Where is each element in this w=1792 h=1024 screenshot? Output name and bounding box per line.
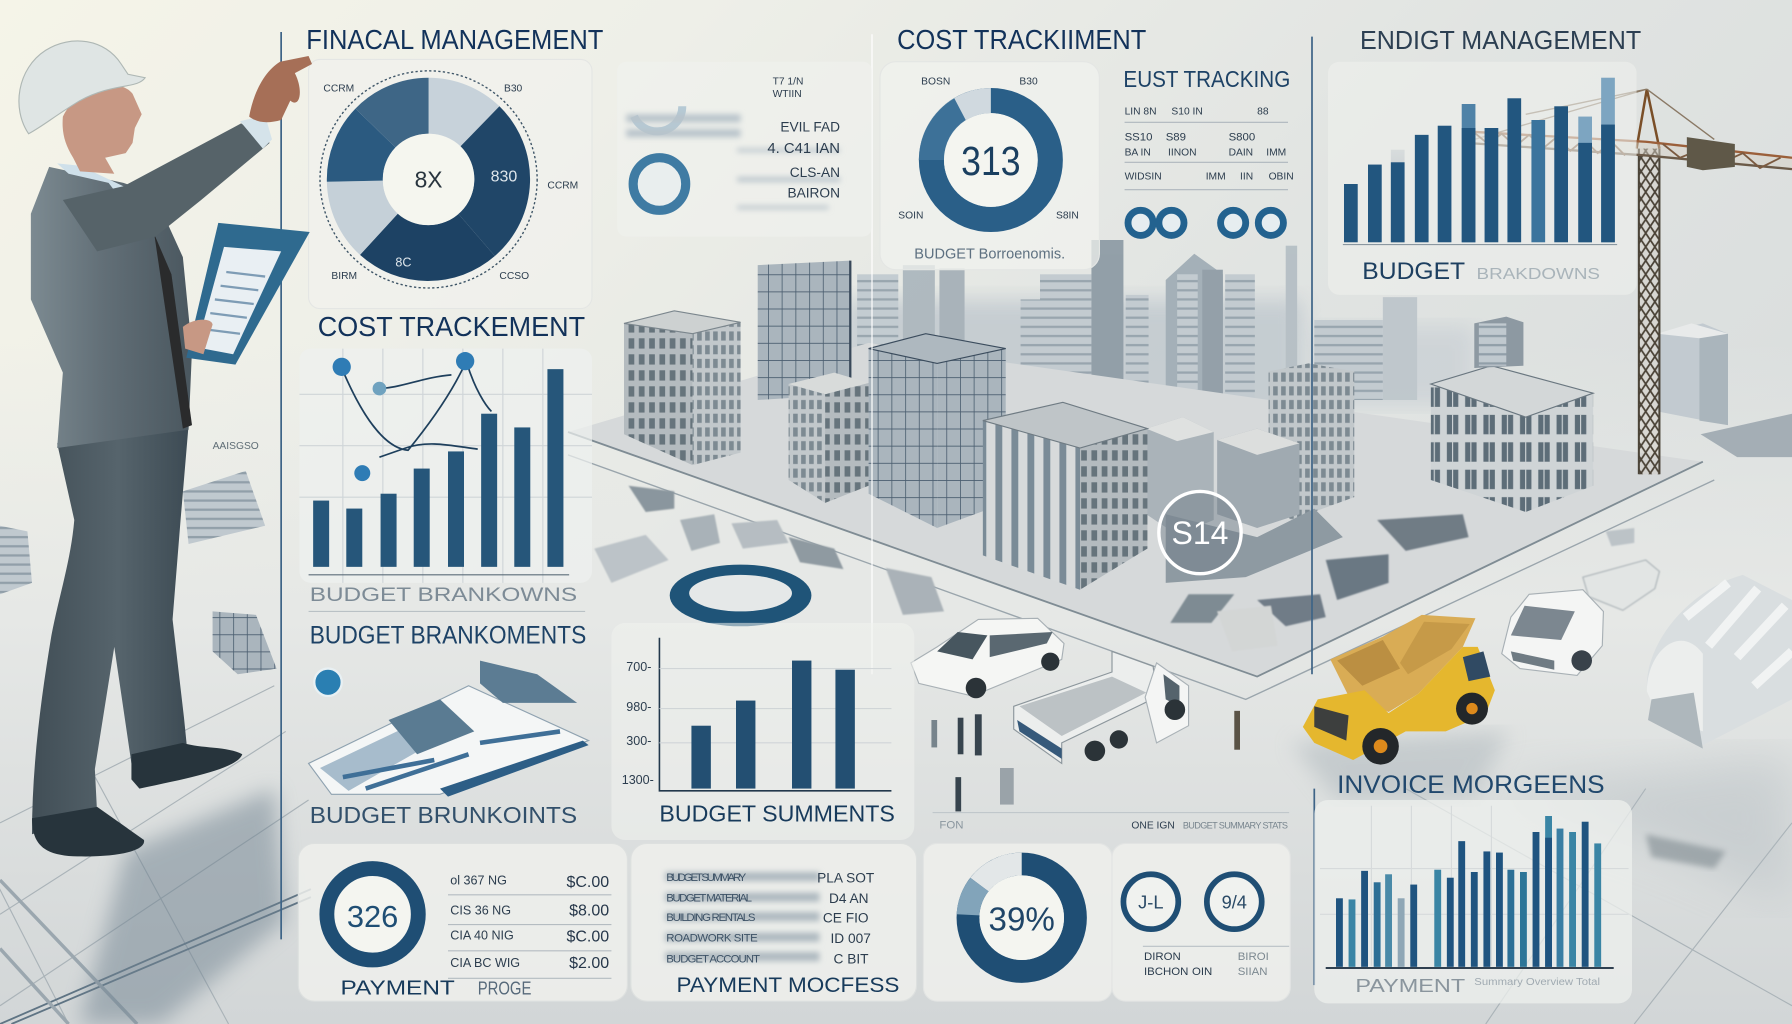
row text: D4 AN bbox=[829, 891, 869, 906]
axis labels: 980- bbox=[626, 700, 651, 714]
pie chart: 830 bbox=[491, 169, 517, 186]
tracking table: IIN bbox=[1240, 171, 1253, 182]
payment rows: $C.00 bbox=[566, 874, 609, 891]
ring captions: IBCHON bbox=[1144, 966, 1188, 978]
row text: BUDGET ACCOUNT bbox=[666, 953, 760, 965]
tracking table: IINON bbox=[1168, 147, 1197, 158]
row text: C BIT bbox=[834, 951, 869, 966]
pie chart: 8X bbox=[415, 166, 443, 192]
panel: cost tracking donut: COST TRACKIIMENT bbox=[897, 24, 1147, 55]
mid building bbox=[789, 373, 869, 503]
panel: budget document bbox=[309, 621, 589, 828]
pie labels: CCRM bbox=[547, 181, 578, 192]
raised arm bbox=[63, 123, 270, 251]
panel: payment rows list: PAYMENT MOCFESS bbox=[677, 972, 899, 997]
row text: BUILDING RENTALS bbox=[666, 912, 756, 924]
bars bbox=[691, 661, 855, 789]
donut labels: B30 bbox=[1019, 77, 1038, 88]
four circular icons bbox=[1128, 210, 1283, 235]
tracking table bbox=[1125, 106, 1294, 190]
tracking table: SS10 bbox=[1125, 132, 1152, 144]
panel: invoice chart: Summary Overview Total bbox=[1474, 977, 1600, 988]
yellow dump truck bbox=[1303, 615, 1495, 765]
pie labels: B30 bbox=[504, 83, 523, 94]
money circle: S14 bbox=[1172, 515, 1228, 551]
tracking table: S89 bbox=[1166, 132, 1186, 144]
ring one bbox=[1123, 874, 1178, 929]
raised hand bbox=[249, 56, 312, 122]
axis labels: 700- bbox=[626, 660, 651, 674]
tablet with notes bbox=[186, 223, 310, 365]
payment rows: $2.00 bbox=[569, 955, 609, 972]
pie labels: BIRM bbox=[331, 271, 357, 282]
donut 313 bbox=[919, 88, 1050, 219]
main building bbox=[983, 402, 1147, 590]
caption strip: BUDGET SUMMARY STATS bbox=[1183, 821, 1288, 831]
panel: budget summary chart bbox=[611, 623, 914, 840]
tower crane bbox=[1466, 89, 1792, 474]
tracking table: DAIN bbox=[1229, 147, 1253, 158]
axis labels: 1300- bbox=[622, 773, 654, 787]
donut labels: SOIN bbox=[898, 210, 923, 221]
ring marker bbox=[670, 565, 811, 626]
caption strip bbox=[933, 813, 1289, 832]
vertical divider lines bbox=[281, 32, 1314, 985]
tracking table: LIN 8N bbox=[1125, 106, 1157, 117]
panel: bust tracking: EUST TRACKING bbox=[1123, 66, 1290, 92]
panel: payment progress 326 bbox=[298, 843, 627, 1001]
panel: payment rows list bbox=[631, 843, 917, 1001]
panel: financial management bbox=[306, 24, 604, 309]
tracking table: BA IN bbox=[1125, 147, 1151, 158]
pie chart: 8C bbox=[395, 255, 411, 269]
donut labels bbox=[898, 77, 1079, 262]
trend line bbox=[342, 361, 491, 457]
white car bbox=[911, 618, 1064, 698]
location pin icon bbox=[314, 669, 342, 696]
list values: T7 1/N bbox=[773, 77, 803, 88]
neck and head bbox=[63, 85, 142, 174]
blurred rows bbox=[626, 114, 840, 209]
ring icon bbox=[633, 158, 686, 210]
axis labels bbox=[622, 660, 654, 787]
row text bbox=[666, 870, 875, 966]
person: engineer with hard hat bbox=[19, 41, 312, 856]
distant skyline bbox=[846, 240, 1474, 437]
jacket bbox=[31, 167, 192, 448]
tracking table: OBIN bbox=[1269, 171, 1294, 182]
pale tower right bbox=[1657, 323, 1728, 425]
hard hat bbox=[19, 41, 145, 134]
panel: budget management chart: BUDGET bbox=[1362, 258, 1465, 285]
row text: BUDGET SUMMARY bbox=[666, 872, 747, 884]
payment rows: CIS 36 NG bbox=[450, 903, 511, 917]
tracking table: WIDSIN bbox=[1125, 171, 1162, 182]
panel: budget management chart: ENDIGT MANAGEMENT bbox=[1360, 25, 1641, 55]
list values bbox=[767, 77, 840, 201]
axis labels: 300- bbox=[626, 734, 651, 748]
panel: invoice chart: INVOICE MORGEENS bbox=[1337, 771, 1605, 799]
panel: ring indicators bbox=[1112, 843, 1290, 1001]
panel: payment list bbox=[617, 62, 872, 237]
pie labels bbox=[323, 83, 578, 282]
panel: invoice chart bbox=[1314, 771, 1632, 1003]
caption strip: FON bbox=[939, 820, 964, 832]
list values: CLS-AN bbox=[790, 165, 840, 180]
donut labels: BUDGET Borroenomis. bbox=[914, 246, 1065, 262]
ring captions: BIROI bbox=[1238, 951, 1269, 963]
panel: bust tracking bbox=[1123, 66, 1294, 235]
row text: CE FIO bbox=[823, 910, 869, 925]
donut 39 percent bbox=[957, 853, 1075, 971]
small site buildings bbox=[0, 414, 1792, 674]
panel: budget document: BUDGET BRANKOMENTS bbox=[310, 621, 586, 649]
donut 326: 326 bbox=[347, 899, 398, 934]
list values: 4. C41 IAN bbox=[767, 141, 840, 157]
scaffold tower bbox=[758, 261, 850, 400]
row text: PLA SOT bbox=[817, 870, 875, 885]
holding hand bbox=[183, 320, 213, 354]
panel: invoice chart: PAYMENT bbox=[1355, 975, 1465, 996]
ring captions bbox=[1143, 946, 1289, 978]
ground plaza and road bbox=[568, 343, 1714, 699]
panel: cost tracking chart: COST TRACKEMENT bbox=[318, 311, 585, 342]
panel: budget management chart: BRAKDOWNS bbox=[1477, 266, 1600, 283]
panel: budget management chart bbox=[1328, 25, 1641, 295]
site workers bbox=[931, 711, 1240, 811]
tracking table: 88 bbox=[1257, 106, 1269, 117]
ring one: J-L bbox=[1138, 892, 1164, 913]
shirt cuff bbox=[240, 115, 272, 149]
list values: EVIL FAD bbox=[780, 119, 840, 134]
pie labels: CCSO bbox=[499, 271, 529, 282]
payment rows: ol 367 NG bbox=[450, 874, 507, 888]
list values: WTIIN bbox=[773, 89, 802, 100]
right building bbox=[1431, 366, 1593, 512]
faded ring icon bbox=[632, 81, 682, 131]
row text: ID 007 bbox=[830, 931, 871, 946]
tracking table: IMM bbox=[1206, 171, 1226, 182]
donut labels: BOSN bbox=[921, 77, 950, 88]
ring captions: OIN bbox=[1192, 966, 1212, 978]
vehicles along road bbox=[594, 486, 1659, 651]
ring two bbox=[1207, 874, 1262, 929]
row text: BUDGET MATERIAL bbox=[666, 893, 752, 905]
ring captions: DIRON bbox=[1144, 951, 1181, 963]
panel: payment progress 326: PROGE bbox=[478, 977, 531, 998]
trend dots bbox=[333, 352, 474, 481]
pie chart bbox=[320, 71, 537, 288]
legs bbox=[32, 425, 189, 834]
tracking table: S10 IN bbox=[1171, 106, 1203, 117]
donut labels: S8IN bbox=[1056, 210, 1079, 221]
tracking table: S800 bbox=[1229, 132, 1255, 144]
shirt and tie bbox=[57, 163, 135, 217]
donut 313: 313 bbox=[961, 138, 1021, 184]
panel: cost tracking chart bbox=[299, 311, 592, 611]
payment rows: $C.00 bbox=[566, 929, 609, 946]
payment rows: $8.00 bbox=[569, 902, 609, 919]
budget plan document bbox=[309, 661, 589, 797]
bars bbox=[313, 369, 563, 567]
blurred bars bbox=[665, 872, 819, 961]
white van bbox=[1502, 590, 1603, 675]
ring two: 9/4 bbox=[1222, 892, 1247, 913]
grey dump truck bbox=[1014, 651, 1189, 763]
hangar bbox=[1647, 575, 1792, 749]
donut 39 percent: 39% bbox=[989, 901, 1055, 938]
scaffold building bbox=[869, 334, 1006, 528]
panel: progress donut 39% bbox=[923, 843, 1112, 1001]
payment rows: CIA BC WIG bbox=[450, 956, 520, 970]
pie labels: CCRM bbox=[323, 83, 354, 94]
shoes bbox=[32, 743, 242, 856]
tower behind right building bbox=[1474, 317, 1523, 368]
caption strip: ONE IGN bbox=[1131, 821, 1175, 832]
payment rows: CIA 40 NIG bbox=[450, 928, 514, 942]
bars bbox=[1344, 78, 1615, 242]
building left bbox=[624, 311, 741, 465]
panel: cost tracking donut bbox=[880, 24, 1147, 270]
panel: budget summary chart: BUDGET SUMMENTS bbox=[659, 801, 895, 827]
panel: budget document: BUDGET BRUNKOINTS bbox=[310, 802, 577, 828]
panel: cost tracking chart: BUDGET BRANKOWNS bbox=[310, 584, 577, 606]
floor label: AAISGSO bbox=[213, 441, 259, 452]
panel: payment progress 326: PAYMENT bbox=[341, 976, 455, 999]
donut 326 bbox=[327, 869, 418, 960]
money circle bbox=[1159, 491, 1241, 574]
far right cluster bbox=[1146, 363, 1354, 583]
row text: ROADWORK SITE bbox=[666, 933, 758, 945]
list values: BAIRON bbox=[787, 186, 840, 201]
panel: financial management: FINACAL MANAGEMENT bbox=[306, 24, 604, 55]
payment rows bbox=[448, 874, 611, 978]
tracking table: IMM bbox=[1266, 147, 1286, 158]
bars bbox=[1336, 816, 1601, 967]
ring captions: SIIAN bbox=[1238, 966, 1268, 978]
